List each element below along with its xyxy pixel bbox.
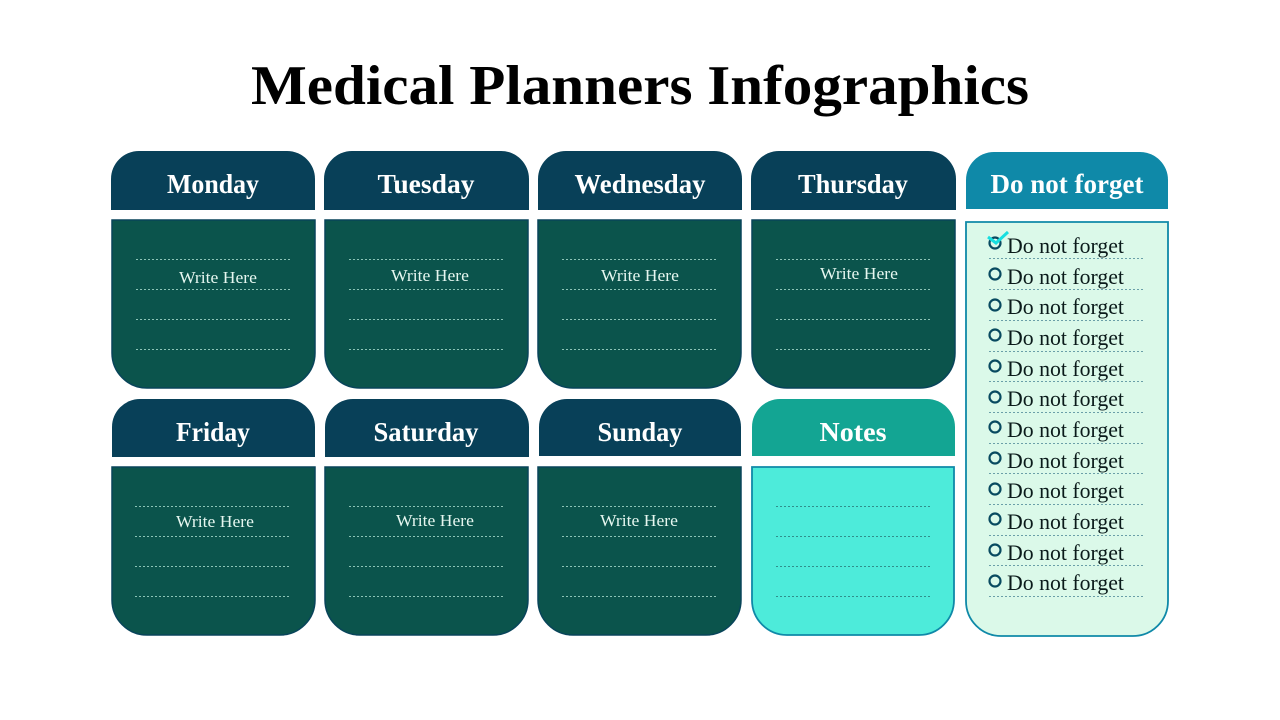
checklist labels: Do not forget (1007, 325, 1125, 350)
panel: Do not forget (966, 152, 1168, 636)
panel: Wednesday (538, 151, 742, 388)
panel: Thursday (751, 151, 956, 388)
checklist labels (1007, 233, 1125, 595)
Wednesday header (538, 151, 742, 210)
panel: Monday (111, 151, 315, 388)
checklist labels: Do not forget (1007, 233, 1125, 258)
Thursday header (751, 151, 956, 210)
Monday body: Write Here (179, 268, 257, 287)
Tuesday body (325, 220, 528, 388)
Tuesday header: Tuesday (378, 169, 475, 199)
Friday body: Write Here (176, 512, 254, 531)
Sunday header (539, 399, 741, 456)
Sunday header: Sunday (598, 417, 683, 447)
Do not forget header: Do not forget (990, 169, 1144, 199)
Saturday body: Write Here (396, 511, 474, 530)
checklist labels: Do not forget (1007, 478, 1125, 503)
checklist labels: Do not forget (1007, 570, 1125, 595)
Monday header: Monday (167, 169, 259, 199)
Thursday body: Write Here (820, 264, 898, 283)
Friday header (112, 399, 315, 457)
Monday body (112, 220, 315, 388)
checklist card (966, 222, 1168, 636)
Wednesday header: Wednesday (574, 169, 706, 199)
checklist labels: Do not forget (1007, 294, 1125, 319)
Thursday body (752, 220, 955, 388)
panel: Friday (112, 399, 315, 635)
Thursday header: Thursday (798, 169, 908, 199)
checklist labels: Do not forget (1007, 264, 1125, 289)
Friday body (112, 467, 315, 635)
checklist labels: Do not forget (1007, 417, 1125, 442)
icon: check mark (988, 232, 1008, 243)
Wednesday body (538, 220, 741, 388)
panel: Sunday (538, 399, 741, 635)
checklist labels: Do not forget (1007, 448, 1125, 473)
Monday header (111, 151, 315, 210)
panel: Saturday (325, 399, 529, 635)
checklist labels: Do not forget (1007, 386, 1125, 411)
Saturday body (325, 467, 528, 635)
Notes header: Notes (820, 417, 886, 447)
checklist labels: Do not forget (1007, 356, 1125, 381)
title: Medical Planners Infographics (251, 55, 1029, 117)
Tuesday body: Write Here (391, 266, 469, 285)
Tuesday header (324, 151, 529, 210)
Friday header: Friday (176, 417, 250, 447)
panel: Notes (752, 399, 955, 635)
Sunday body (538, 467, 741, 635)
Notes body (752, 467, 954, 635)
checklist labels: Do not forget (1007, 509, 1125, 534)
Sunday body: Write Here (600, 511, 678, 530)
Notes header (752, 399, 955, 456)
panel: Tuesday (324, 151, 529, 388)
checklist circles (990, 238, 1000, 586)
Do not forget header (966, 152, 1168, 209)
Saturday header: Saturday (374, 417, 479, 447)
Saturday header (325, 399, 529, 457)
Wednesday body: Write Here (601, 266, 679, 285)
checklist labels: Do not forget (1007, 540, 1125, 565)
